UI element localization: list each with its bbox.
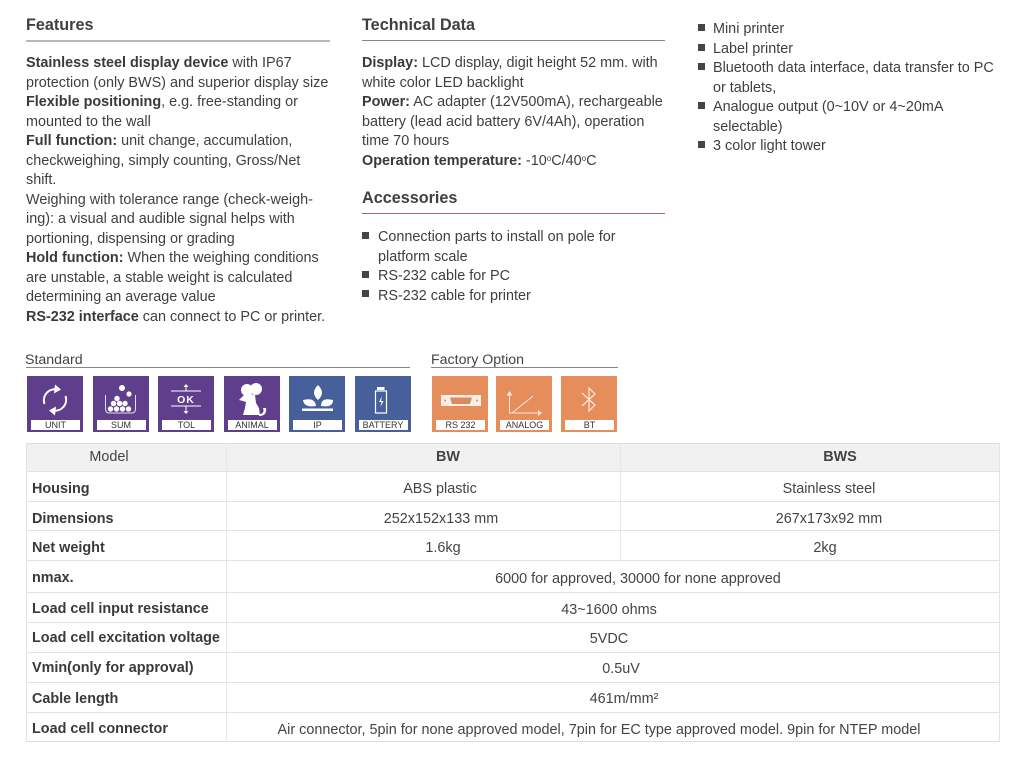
icon: unit [27, 376, 83, 432]
panel: options list: Label printer [713, 40, 793, 56]
features text: portioning, dispensing or grading [26, 231, 235, 247]
row: cable length [32, 691, 658, 707]
panel: options list [698, 21, 994, 154]
panel: options list: 3 color light tower [713, 138, 826, 154]
row: dimensions: 252x152x133 mm [384, 511, 498, 527]
accessories list: Connection parts to install on pole for [378, 229, 616, 245]
row: load cell connector [32, 721, 920, 738]
technical data text: time 70 hours [362, 133, 449, 149]
row: net weight [32, 540, 837, 556]
panel: accessories [362, 189, 665, 304]
technical data text: Display: LCD display, digit height 52 mm. with [362, 55, 658, 71]
icon: bluetooth: BT [584, 420, 595, 430]
row: load cell connector: Load cell connector [32, 721, 168, 737]
accessories list: platform scale [378, 248, 468, 264]
technical data text: Power: AC adapter (12V500mA), rechargeable [362, 94, 663, 110]
row: net weight: Net weight [32, 540, 105, 556]
technical data text: battery (lead acid battery 6V/4Ah), operation [362, 114, 644, 130]
features text: shift. [26, 172, 56, 188]
row: load cell input resistance: Load cell input resistance [32, 601, 209, 617]
heading: technical data: Technical Data [362, 16, 475, 34]
row: load cell input resistance: 43~1600 ohms [561, 602, 657, 618]
row: load cell connector: Air connector, 5pin for none approved model, 7pin for EC type approved model. 9pin for NTEP model [278, 722, 920, 738]
icon: rs 232 [432, 376, 488, 432]
row: nmax: nmax. [32, 570, 74, 586]
features text [26, 55, 328, 324]
features text: ing): a visual and audible signal helps with [26, 211, 295, 227]
row: dimensions: 267x173x92 mm [776, 511, 882, 527]
row: cable length: 461m/mm² [590, 691, 658, 707]
row: net weight: 1.6kg [425, 540, 461, 556]
features text: are unstable, a stable weight is calculated [26, 270, 292, 286]
table text: model row: Model [89, 449, 129, 465]
panel: technical data [362, 16, 665, 168]
icon: bluetooth [561, 376, 617, 432]
icon: ip: IP [313, 420, 322, 430]
panel: options list: Bluetooth data interface, data transfer to PC [713, 60, 994, 76]
icon: sum [92, 376, 148, 432]
technical data text: Operation temperature: -10oC/40oC [362, 152, 596, 168]
accessories list: RS-232 cable for PC [378, 268, 510, 284]
row: load cell excitation voltage [32, 630, 628, 647]
row: housing [32, 481, 875, 497]
features text: protection (only BWS) and superior display size [26, 74, 328, 90]
icon: sum: SUM [111, 420, 131, 430]
icon: tol: TOL [178, 420, 195, 430]
icon: rs 232: RS 232 [445, 420, 476, 430]
icon: ip [289, 376, 345, 432]
panel: options list: Mini printer [713, 21, 784, 37]
panel: features [26, 16, 330, 324]
icon: animal [224, 376, 280, 432]
row: housing: Housing [32, 481, 90, 497]
features text: Stainless steel display device with IP67 [26, 55, 292, 71]
table text: model row [89, 449, 857, 465]
features text: mounted to the wall [26, 114, 151, 130]
accessories list [362, 229, 616, 304]
technical data text [362, 55, 663, 168]
features text: RS-232 interface can connect to PC or printer. [26, 308, 325, 324]
row: nmax [32, 570, 781, 587]
row: dimensions [32, 511, 882, 527]
spec table [26, 443, 1000, 742]
row: load cell excitation voltage: 5VDC [590, 631, 628, 647]
row: housing: Stainless steel [783, 481, 875, 497]
features text: Hold function: When the weighing conditions [26, 250, 319, 266]
panel: options list: or tablets, [713, 80, 776, 96]
icon: tol: OK [177, 394, 195, 406]
icon: battery: BATTERY [363, 420, 403, 430]
features text: Weighing with tolerance range (check-weigh- [26, 192, 313, 208]
features text: Full function: unit change, accumulation, [26, 133, 292, 149]
row: cable length: Cable length [32, 691, 118, 707]
heading: standard: Standard [25, 352, 83, 368]
table text: model row: BW [436, 449, 460, 465]
panel: options list: Analogue output (0~10V or 4~20mA [713, 99, 943, 115]
row: nmax: 6000 for approved, 30000 for none approved [495, 571, 781, 587]
row: vmin [32, 660, 640, 677]
icon: animal: ANIMAL [235, 420, 269, 430]
row: vmin: Vmin(only for approval) [32, 660, 194, 676]
heading: accessories: Accessories [362, 189, 457, 207]
icon: tol [158, 376, 214, 432]
table header [26, 443, 1000, 471]
technical data text: white color LED backlight [362, 74, 524, 90]
heading: factory option: Factory Option [431, 352, 524, 368]
accessories list: RS-232 cable for printer [378, 288, 531, 304]
features text: Flexible positioning, e.g. free-standing or [26, 94, 298, 110]
panel: options list: selectable) [713, 118, 783, 134]
heading: features: Features [26, 16, 93, 34]
row: dimensions: Dimensions [32, 511, 114, 527]
icon: analog [496, 376, 552, 432]
icon: battery [354, 376, 410, 432]
icon: unit: UNIT [45, 420, 66, 430]
icon: analog: ANALOG [506, 420, 543, 430]
row: load cell excitation voltage: Load cell excitation voltage [32, 630, 220, 646]
features text: checkweighing, simply counting, Gross/Net [26, 153, 300, 169]
row: net weight: 2kg [813, 540, 837, 556]
table text: model row: BWS [823, 449, 857, 465]
features text: determining an average value [26, 289, 216, 305]
row: housing: ABS plastic [403, 481, 477, 497]
row: load cell input resistance [32, 601, 657, 618]
row: vmin: 0.5uV [602, 661, 640, 677]
